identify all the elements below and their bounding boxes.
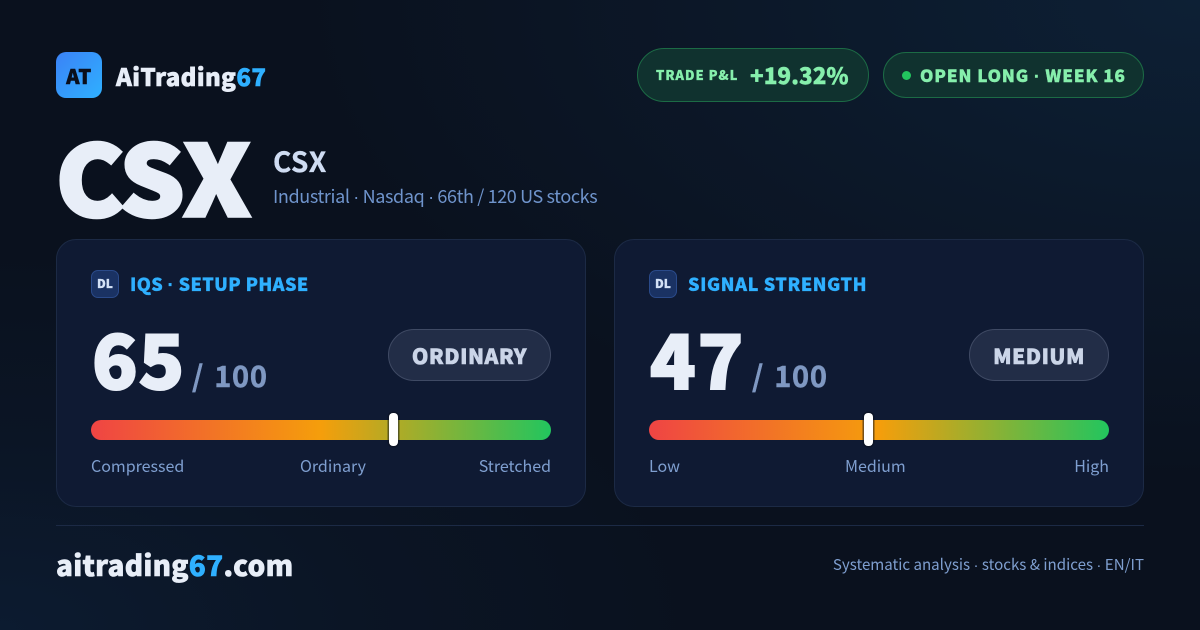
gauge label high: Stretched xyxy=(479,453,551,477)
score: 65 xyxy=(92,302,185,411)
panel heading: SIGNAL STRENGTH xyxy=(688,271,867,297)
gauge label low: Compressed xyxy=(91,453,184,477)
ticker large: CSX xyxy=(56,103,249,244)
gauge label high: High xyxy=(1074,453,1109,477)
company details: Industrial · Nasdaq · 66th / 120 US stocks xyxy=(273,183,597,209)
rating pill: ORDINARY xyxy=(412,341,527,371)
score scale: / 100 xyxy=(752,354,828,396)
gauge label low: Low xyxy=(649,453,680,477)
gauge label mid: Medium xyxy=(845,453,906,477)
gauge marker xyxy=(864,413,873,446)
rating pill xyxy=(969,329,1109,381)
badge: position status: OPEN LONG · WEEK 16 xyxy=(920,62,1126,87)
score: 47 xyxy=(650,302,745,411)
company name: CSX xyxy=(273,141,327,181)
badge: trade P&L: +19.32% xyxy=(750,59,849,91)
logo icon: AT xyxy=(66,61,92,90)
gauge bar xyxy=(649,420,1109,440)
panel: IQS setup phase xyxy=(56,239,586,507)
icon: DL badge xyxy=(91,270,119,298)
panel: signal strength xyxy=(614,239,1144,507)
gauge marker xyxy=(389,413,398,446)
rating pill: MEDIUM xyxy=(993,341,1085,371)
brand name: AiTrading67 xyxy=(116,58,266,93)
panel heading: IQS · SETUP PHASE xyxy=(130,271,309,297)
divider xyxy=(56,525,1144,526)
badge: trade P&L: TRADE P&L xyxy=(656,65,738,84)
icon: DL badge: DL xyxy=(655,275,671,292)
gauge label mid: Ordinary xyxy=(300,453,366,477)
gauge bar xyxy=(91,420,551,440)
badge: position status xyxy=(883,52,1144,98)
logo icon xyxy=(56,52,102,98)
score scale: / 100 xyxy=(192,354,268,396)
icon: DL badge: DL xyxy=(97,275,113,292)
icon: DL badge xyxy=(649,270,677,298)
footer tagline: Systematic analysis · stocks & indices · EN/IT xyxy=(833,553,1144,575)
rating pill xyxy=(388,329,551,381)
footer url: aitrading67.com xyxy=(56,545,293,585)
badge: trade P&L xyxy=(637,48,869,102)
